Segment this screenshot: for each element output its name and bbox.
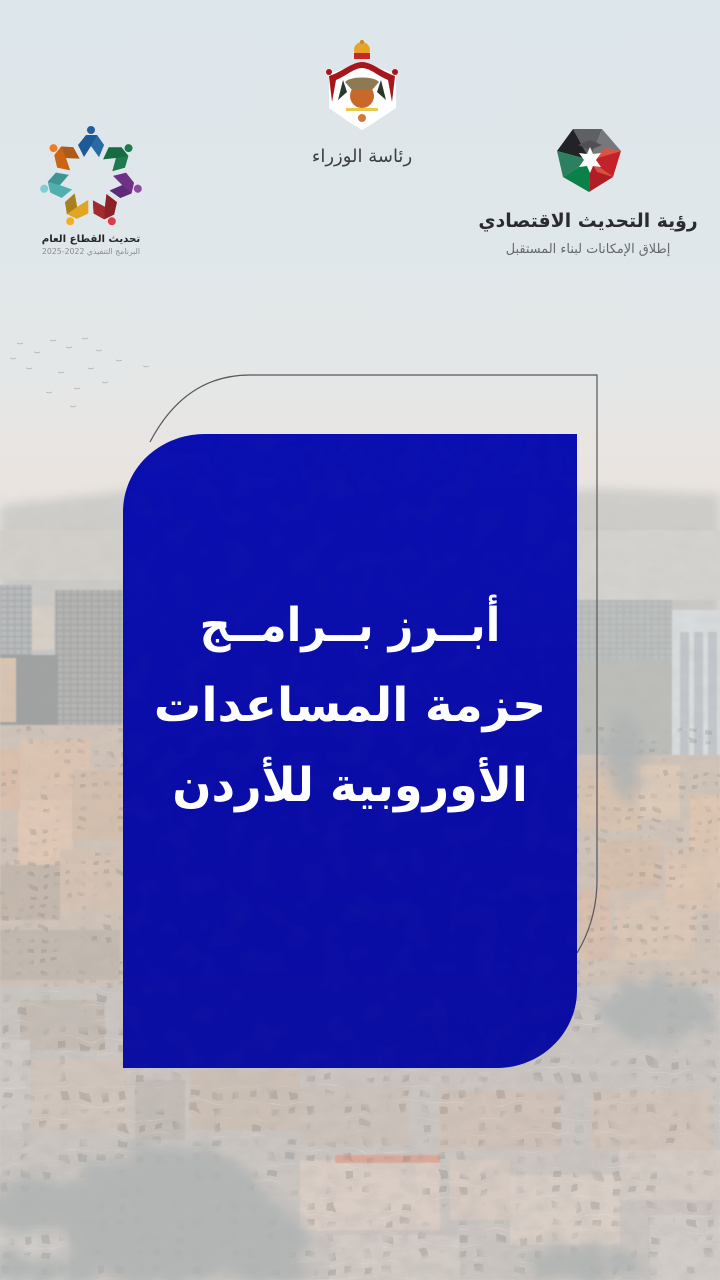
city: foreground houses xyxy=(0,985,720,1280)
icon: heptagon xyxy=(557,129,621,192)
logo: economic modernization vision xyxy=(478,129,698,257)
logo text: تحديث القطاع العام xyxy=(42,234,140,245)
emblem calligraphy text: رئاسة الوزراء xyxy=(312,146,412,167)
panel title xyxy=(154,594,546,813)
city: texture overlay xyxy=(4,652,717,1280)
city: tree clusters xyxy=(0,713,710,1280)
city: mid district xyxy=(0,530,720,765)
background: birds xyxy=(10,338,149,407)
thin outline frame behind panel xyxy=(150,375,597,953)
logo: prime ministry emblem xyxy=(312,40,412,167)
city: base with skyline xyxy=(0,488,720,1280)
panel title: الأوروبية للأردن xyxy=(172,756,528,813)
icon: coat of arms xyxy=(326,40,398,130)
panel title: أبــرز بــرامــج xyxy=(200,594,500,652)
logo subtitle: البرنامج التنفيذي 2022-2025 xyxy=(42,247,140,256)
panel title: حزمة المساعدات xyxy=(154,678,546,733)
city: scattered windows xyxy=(0,725,720,1280)
background: city photo xyxy=(0,488,720,1280)
logo title: رؤية التحديث الاقتصادي xyxy=(478,211,698,233)
logo: public sector modernization xyxy=(37,126,145,256)
blue title panel xyxy=(123,434,577,1068)
icon: ring of people xyxy=(37,126,145,230)
city: terraced houses xyxy=(0,725,720,995)
logo subtitle: إطلاق الإمكانات لبناء المستقبل xyxy=(506,242,670,257)
